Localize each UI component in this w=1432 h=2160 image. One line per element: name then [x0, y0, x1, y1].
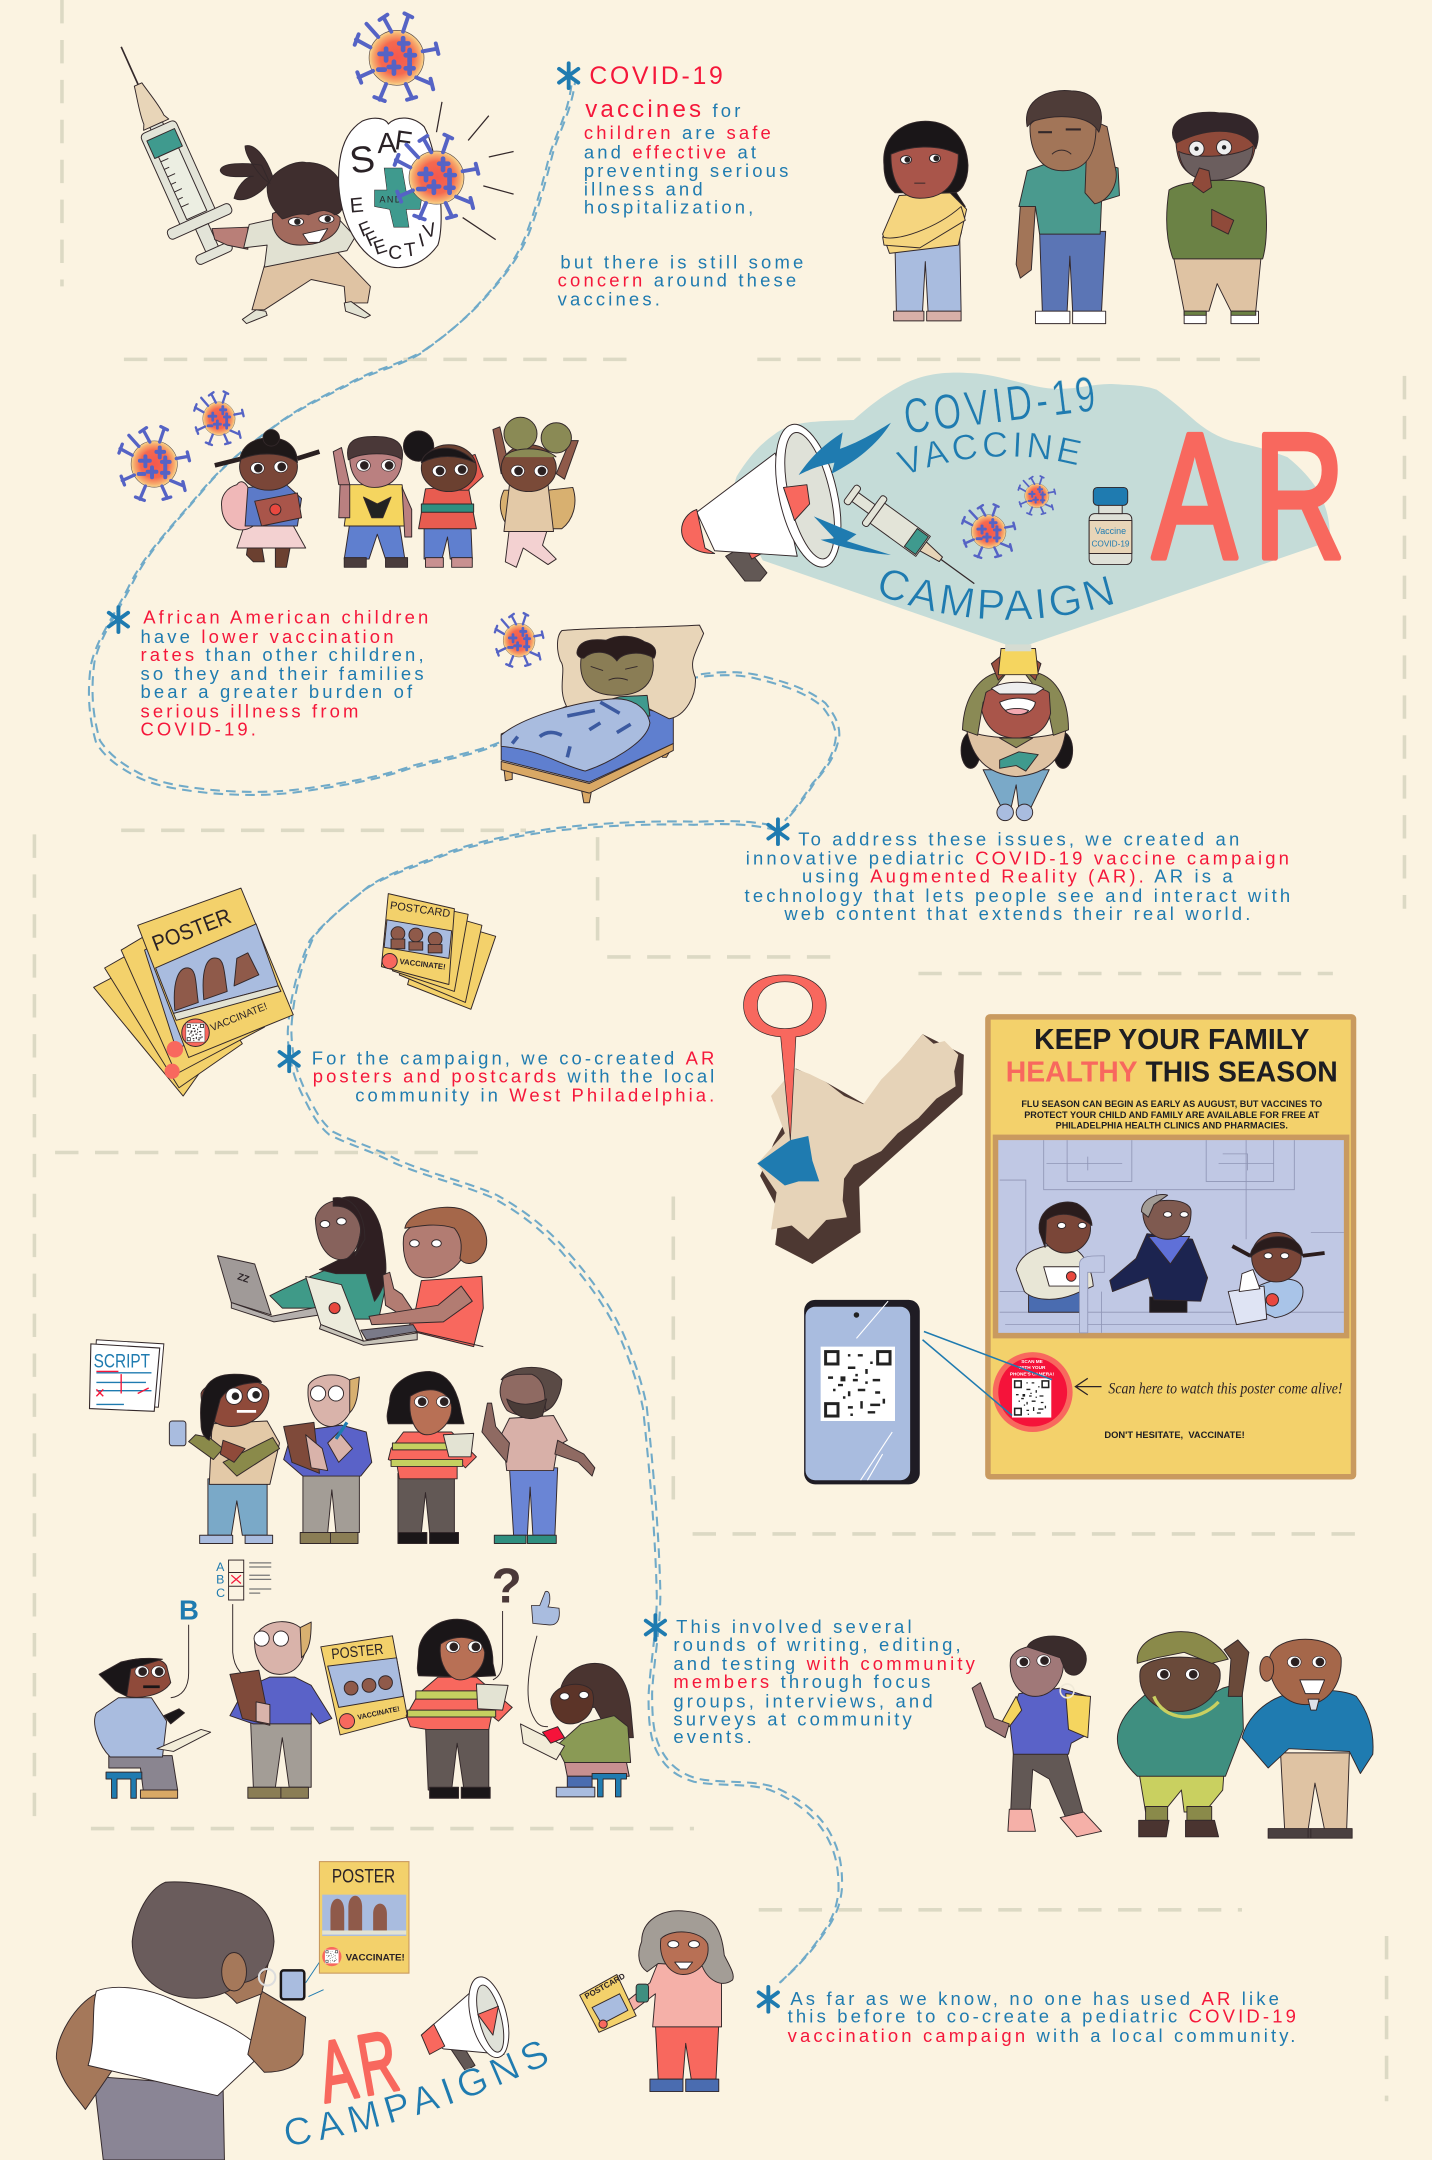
poster front: VACCINATE!	[209, 1001, 269, 1034]
text block: co-created posters: For the campaign, we co-created AR	[312, 1047, 717, 1068]
icon: asterisk	[109, 607, 128, 632]
poster held between figures: POSTER	[330, 1641, 384, 1663]
character: woman waving	[972, 1636, 1102, 1837]
icon: vaccine vial: Vaccine	[1095, 526, 1126, 536]
icon: large syringe	[90, 33, 247, 272]
text block: lower vaccination rates: COVID-19.	[140, 718, 259, 739]
icon: safe and effective shield: T	[403, 239, 418, 262]
phone screen	[806, 1307, 910, 1480]
icon: answer B: B	[179, 1594, 199, 1625]
character: adult from behind	[56, 1882, 306, 2160]
phone QR code	[821, 1347, 895, 1421]
icon: small virus	[194, 391, 244, 445]
poster held between figures: VACCINATE!	[357, 1705, 401, 1722]
text block: first of its kind: vaccination campaign with a local community.	[788, 2025, 1299, 2046]
text block: rounds of testing	[646, 1615, 978, 1747]
text block: lower vaccination rates: have lower vaccination	[140, 626, 397, 647]
text block: first of its kind: As far as we know, no one has used AR like	[790, 1988, 1282, 2009]
poster on wall: POSTER	[332, 1866, 395, 1887]
character: woman typing	[218, 1197, 386, 1322]
icon: virus near bed	[495, 613, 543, 667]
panel: testing row	[95, 1558, 633, 1798]
icon: script papers: SCRIPT	[94, 1351, 150, 1372]
character: girl in striped top	[403, 431, 483, 567]
character: woman in striped sweater	[387, 1371, 476, 1544]
panel: postcards stack	[381, 894, 496, 1009]
poster frame	[988, 1017, 1354, 1477]
text block: vaccines safe: and effective at	[584, 141, 759, 162]
text block: AR campaign description	[745, 819, 1293, 924]
speech line question	[493, 1611, 503, 1680]
light beam	[734, 373, 1330, 649]
character: person projecting AR with phone	[961, 644, 1073, 821]
icon: sound bolts	[799, 423, 891, 475]
QR sticker: PHONE'S CAMERA!	[1010, 1371, 1055, 1376]
speech line B	[171, 1625, 189, 1698]
counter post	[1080, 1256, 1104, 1333]
speech line A B C	[233, 1604, 256, 1681]
text block: vaccines safe: vaccines for	[585, 96, 744, 123]
character: seated woman with tablet	[520, 1663, 633, 1797]
title: CAMPAIGNS: CAMPAIGNS	[286, 2042, 548, 2145]
girl with tissue	[1228, 1232, 1325, 1325]
text block: lower vaccination rates: so they and their families	[140, 663, 427, 684]
burst lines	[436, 102, 514, 240]
character: woman with tablet	[406, 1619, 512, 1798]
text block: AR campaign description: web content that extends their real world.	[783, 903, 1254, 924]
man in navy blazer	[1110, 1194, 1208, 1312]
QR sticker: SCAN ME	[1021, 1359, 1043, 1364]
character: woman with phone	[169, 1374, 280, 1544]
icon: virus hitting shield	[395, 135, 478, 219]
QR sticker	[993, 1352, 1073, 1432]
text block: vaccines safe: vaccines.	[558, 289, 663, 310]
character: girl with syringe	[212, 146, 370, 324]
panel: West Philadelphia map	[744, 975, 964, 1264]
character: man with grey beard	[1167, 112, 1267, 324]
icon: safe and effective shield: F	[356, 218, 375, 242]
panel: virus and children	[119, 391, 578, 567]
panel: posters stack	[94, 888, 293, 1096]
icon: safe and effective shield: F	[393, 124, 414, 157]
panel: community members	[972, 1632, 1373, 1838]
panel: focus group standing row	[169, 1367, 595, 1544]
character: man in olive cap	[1117, 1632, 1249, 1837]
icon: safe and effective shield: C	[388, 243, 402, 264]
icon: asterisk	[646, 1615, 665, 1640]
text block: rounds of testing: groups, interviews, and	[673, 1690, 936, 1711]
text block: vaccines safe: concern around these	[558, 269, 799, 290]
character: boy typing	[306, 1207, 487, 1347]
icon: asterisk	[280, 1046, 299, 1071]
phone body	[804, 1300, 920, 1484]
icon: safe and effective shield: E	[349, 193, 365, 218]
icon: vaccine vial	[1089, 487, 1132, 565]
text block: rounds of testing: events.	[673, 1726, 755, 1747]
poster held between figures	[321, 1636, 408, 1735]
text block: vaccines safe: preventing serious	[584, 160, 791, 181]
icon: safe and effective shield: AND	[380, 194, 403, 204]
speech line thumbs	[528, 1636, 548, 1727]
icon: lower sound bolt	[814, 516, 891, 555]
icon: safe and effective shield: I	[416, 230, 427, 252]
icon: asterisk	[759, 1987, 778, 2012]
icon: safe and effective shield: S	[347, 137, 377, 182]
text block: co-created posters: community in West Philadelphia.	[355, 1085, 717, 1106]
character: woman with crossed arms	[883, 121, 968, 321]
icon: safe and effective shield	[339, 118, 441, 268]
character: bearded man gesturing	[482, 1367, 595, 1544]
text block: lower vaccination rates: rates than other children,	[140, 644, 427, 665]
arrow to QR sticker	[1075, 1378, 1102, 1395]
character: bald man with poster	[230, 1622, 332, 1798]
headline second line: HEALTHY THIS SEASON	[1006, 1057, 1338, 1089]
city shape	[757, 1034, 958, 1239]
text block: vaccines safe: COVID-19	[589, 63, 726, 90]
text block: vaccines safe	[558, 63, 806, 310]
icon: virus top	[355, 13, 438, 101]
QR sticker: WITH YOUR	[1019, 1365, 1046, 1370]
poster on wall: VACCINATE!	[346, 1953, 405, 1964]
handwritten note: Scan here to watch this poster come alive!	[1108, 1380, 1342, 1397]
poster front: POSTER	[148, 903, 235, 956]
connector lines from phone to QR sticker	[923, 1331, 1052, 1415]
character: bald man with clipboard	[284, 1375, 372, 1544]
icon: multiple choice card: C	[216, 1586, 225, 1600]
character: woman typing: ZZ	[236, 1272, 251, 1286]
panel: phone scanning QR	[804, 1300, 920, 1484]
text block: lower vaccination rates: African American children	[143, 607, 431, 628]
icon: multiple choice card: A	[216, 1560, 225, 1574]
icon: multiple choice card	[216, 1560, 271, 1600]
poster back sheets	[94, 912, 264, 1096]
text block: rounds of testing: This involved several	[676, 1616, 915, 1637]
subheading	[1021, 1099, 1322, 1130]
subheading: PROTECT YOUR CHILD AND FAMILY ARE AVAILABLE FOR FREE AT	[1024, 1110, 1320, 1120]
icon: multiple choice card: B	[216, 1572, 224, 1586]
panel: postcards stack: POSTCARD	[389, 900, 451, 920]
panel: vaccine fights virus	[90, 33, 514, 324]
camera dot	[854, 1312, 859, 1318]
woman with bowl	[1016, 1202, 1093, 1312]
subheading: FLU SEASON CAN BEGIN AS EARLY AS AUGUST, BUT VACCINES TO	[1021, 1099, 1322, 1109]
title: CAMPAIGN: CAMPAIGN	[880, 570, 1114, 620]
text block: vaccines safe: illness and	[584, 179, 706, 200]
panel: postcards stack: VACCINATE!	[399, 957, 446, 971]
icon: safe and effective shield: E	[371, 236, 390, 260]
panel: flu season poster	[988, 1017, 1354, 1477]
panel: AR campaign projection	[681, 367, 1345, 822]
text block: co-created posters: posters and postcards with the local	[313, 1065, 717, 1086]
icon: small virus	[1018, 476, 1055, 515]
title: AR: AR	[312, 2013, 405, 2122]
icon: vaccine vial: COVID-19	[1091, 540, 1130, 549]
poster call to action: DON'T HESITATE, VACCINATE!	[1104, 1430, 1245, 1440]
headline: KEEP YOUR FAMILY	[1034, 1024, 1309, 1056]
character: older man in blue	[1242, 1639, 1373, 1838]
icon: script papers	[90, 1340, 164, 1411]
icon: location pin	[744, 975, 826, 1140]
icon: small megaphone	[421, 1973, 516, 2071]
text block: rounds of testing: surveys at community	[673, 1708, 915, 1729]
icon: syringe	[839, 478, 985, 598]
character: grandmother with postcard: POSTCARD	[583, 1971, 627, 2001]
icon: safe and effective shield: V	[421, 219, 439, 243]
title: COVID-19: COVID-19	[901, 367, 1102, 445]
poster front	[138, 888, 293, 1079]
text block: co-created posters	[280, 1046, 717, 1106]
character: grandmother with postcard	[580, 1911, 733, 2092]
scan lines	[306, 1962, 324, 1997]
text block: lower vaccination rates: bear a greater burden of	[140, 681, 415, 702]
poster on wall	[319, 1862, 409, 1973]
character: seated man with phone	[95, 1658, 211, 1798]
character: child with arms raised	[493, 417, 578, 567]
icon: megaphone	[682, 418, 853, 581]
map shadow edge	[760, 1034, 964, 1264]
kitchen lines	[1000, 1140, 1344, 1333]
character: sick child in bed	[501, 625, 704, 803]
icon: virus	[962, 504, 1015, 558]
icon: virus	[119, 427, 189, 500]
glass glare	[856, 1301, 892, 1480]
icon: asterisk	[768, 819, 788, 844]
text block: lower vaccination rates	[109, 607, 431, 739]
panel: three concerned adults	[883, 90, 1267, 324]
panel: person scanning poster with phone	[56, 1861, 548, 2160]
character: girl with backpack	[215, 430, 319, 567]
kitchen scene	[996, 1137, 1347, 1336]
text block: rounds of testing: members through focus	[673, 1671, 934, 1692]
icon: safe and effective shield: A	[377, 127, 398, 160]
text block: lower vaccination rates: serious illness from	[140, 700, 362, 721]
title: AR: AR	[1152, 396, 1345, 596]
panel: co-writing team at laptops	[218, 1197, 487, 1347]
subheading: PHILADELPHIA HEALTH CLINICS AND PHARMACIES.	[1056, 1120, 1288, 1130]
icon: thumbs up	[531, 1591, 559, 1625]
icon: question mark: ?	[492, 1558, 522, 1614]
text block: vaccines safe: but there is still some	[560, 252, 806, 273]
dashed route connecting the story	[89, 82, 842, 1986]
text block: AR campaign description: technology that lets people see and interact with	[745, 885, 1293, 906]
text block: vaccines safe: hospitalization,	[584, 196, 756, 217]
text block: rounds of testing: and testing with community	[673, 1653, 978, 1674]
icon: asterisk	[559, 63, 578, 88]
title: VACCINE: VACCINE	[896, 432, 1081, 472]
text block: vaccines safe: children are safe	[584, 122, 774, 143]
text block: AR campaign description: To address these issues, we created an	[798, 828, 1242, 849]
icon: safe and effective shield: F	[363, 227, 382, 251]
text block: rounds of testing: rounds of writing, editing,	[673, 1634, 964, 1655]
character: boy in bat shirt	[333, 436, 412, 567]
West Philadelphia highlight	[757, 1136, 819, 1186]
character: man with hand on face	[1016, 90, 1119, 324]
text block: AR campaign description: using Augmented Reality (AR). AR is a	[802, 866, 1236, 887]
text block: first of its kind: this before to co-create a pediatric COVID-19	[788, 2006, 1299, 2027]
text block: first of its kind	[759, 1987, 1299, 2046]
text block: AR campaign description: innovative pediatric COVID-19 vaccine campaign	[746, 848, 1292, 869]
